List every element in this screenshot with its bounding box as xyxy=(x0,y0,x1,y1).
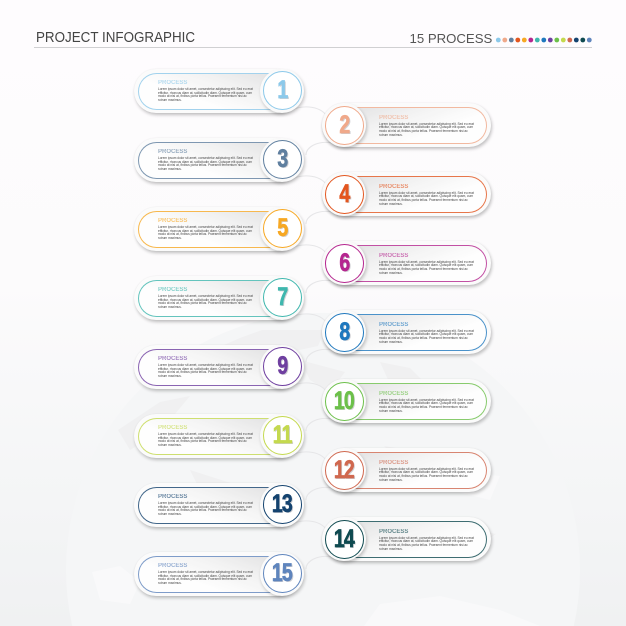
step 7 number badge: 7 xyxy=(277,283,287,311)
step 1 number badge xyxy=(260,68,304,112)
step 14 text: rutrum maximus. xyxy=(379,547,403,551)
step 12 number badge xyxy=(322,448,366,492)
step 2 text: rutrum maximus. xyxy=(379,133,403,137)
step 12 text: efficitur, rhoncus diam at, sollicitudin diam. Quisque elit quam, cum xyxy=(379,470,473,474)
step 2 heading: PROCESS xyxy=(379,114,408,120)
step 14 text xyxy=(379,536,474,551)
step 14 text: Lorem ipsum dolor sit amet, consectetur adipiscing elit. Sed eu erat xyxy=(379,536,474,540)
step 3 number badge xyxy=(260,138,304,182)
step 10 text xyxy=(379,398,474,413)
step 13 text: efficitur, rhoncus diam at, sollicitudin diam. Quisque elit quam, cum xyxy=(158,505,252,509)
step 14 number badge xyxy=(322,517,366,561)
step 12 card xyxy=(321,448,494,496)
step 11 number badge: 11 xyxy=(272,421,292,449)
step 2 text: Lorem ipsum dolor sit amet, consectetur adipiscing elit. Sed eu erat xyxy=(379,122,474,126)
step 5 text: modo at nisi at, finibus porta tellus. Praesent fermentum nisi ac xyxy=(158,232,247,236)
step 15 text xyxy=(158,570,253,585)
step 7 text: rutrum maximus. xyxy=(158,305,182,309)
step 13 number badge xyxy=(260,482,304,526)
step 11 text: modo at nisi at, finibus porta tellus. Praesent fermentum nisi ac xyxy=(158,439,247,443)
step 11 text: rutrum maximus. xyxy=(158,443,182,447)
subtitle: 15 process: 15 PROCESS xyxy=(410,30,492,46)
step 2 text: efficitur, rhoncus diam at, sollicitudin diam. Quisque elit quam, cum xyxy=(379,125,473,129)
step 15 number badge xyxy=(260,552,304,596)
step 7 heading: PROCESS xyxy=(158,287,187,293)
step 10 text: modo at nisi at, finibus porta tellus. Praesent fermentum nisi ac xyxy=(379,405,468,409)
step 13 text xyxy=(158,501,253,516)
step 5 text: efficitur, rhoncus diam at, sollicitudin diam. Quisque elit quam, cum xyxy=(158,229,252,233)
step 2 number badge: 2 xyxy=(339,110,349,138)
step 12 text: modo at nisi at, finibus porta tellus. Praesent fermentum nisi ac xyxy=(379,474,468,478)
step 1 number badge: 1 xyxy=(277,76,287,104)
step 15 text: rutrum maximus. xyxy=(158,581,182,585)
step 5 number badge xyxy=(260,206,304,250)
step 15 heading: PROCESS xyxy=(158,563,187,569)
title: PROJECT INFOGRAPHIC xyxy=(36,29,195,46)
step 8 text: rutrum maximus. xyxy=(379,340,403,344)
step 6 text: rutrum maximus. xyxy=(379,271,403,275)
step 3 text: Lorem ipsum dolor sit amet, consectetur adipiscing elit. Sed eu erat xyxy=(158,156,253,160)
step 8 text: modo at nisi at, finibus porta tellus. Praesent fermentum nisi ac xyxy=(379,336,468,340)
step 9 card xyxy=(134,344,306,393)
step 9 number badge: 9 xyxy=(277,352,287,380)
step 12 text: Lorem ipsum dolor sit amet, consectetur adipiscing elit. Sed eu erat xyxy=(379,467,474,471)
step 9 text: modo at nisi at, finibus porta tellus. Praesent fermentum nisi ac xyxy=(158,370,247,374)
step 8 text xyxy=(379,329,474,344)
step 11 text: Lorem ipsum dolor sit amet, consectetur adipiscing elit. Sed eu erat xyxy=(158,432,253,436)
step 6 text xyxy=(379,260,474,275)
step 5 card xyxy=(134,206,306,255)
step 1 text: rutrum maximus. xyxy=(158,98,182,102)
step 6 number badge: 6 xyxy=(339,248,349,276)
step 2 text xyxy=(379,122,474,137)
step 1 text: modo at nisi at, finibus porta tellus. Praesent fermentum nisi ac xyxy=(158,94,247,98)
step 9 text: Lorem ipsum dolor sit amet, consectetur adipiscing elit. Sed eu erat xyxy=(158,363,253,367)
step 1 card xyxy=(134,68,306,117)
step 4 heading: PROCESS xyxy=(379,184,408,190)
step 13 heading: PROCESS xyxy=(158,494,187,500)
step 10 number badge: 10 xyxy=(334,386,354,414)
step 14 heading: PROCESS xyxy=(379,528,408,534)
step 15 text: efficitur, rhoncus diam at, sollicitudin diam. Quisque elit quam, cum xyxy=(158,574,252,578)
step 1 heading: PROCESS xyxy=(158,80,187,86)
step 8 number badge xyxy=(322,310,366,354)
step 2 card xyxy=(321,102,494,151)
step 12 heading: PROCESS xyxy=(379,460,408,466)
header rule xyxy=(34,47,592,48)
step 5 heading: PROCESS xyxy=(158,218,187,224)
step 6 number badge xyxy=(322,241,366,285)
step 3 text: rutrum maximus. xyxy=(158,167,182,171)
step 2 number badge xyxy=(322,103,366,147)
step 7 card xyxy=(134,276,306,324)
step 3 text: modo at nisi at, finibus porta tellus. Praesent fermentum nisi ac xyxy=(158,163,247,167)
step 13 card xyxy=(134,482,306,531)
step 12 text: rutrum maximus. xyxy=(379,478,403,482)
step 14 number badge: 14 xyxy=(334,524,354,552)
step 11 text xyxy=(158,432,253,447)
step 5 text: rutrum maximus. xyxy=(158,236,182,240)
step 14 card xyxy=(321,516,494,565)
step 11 heading: PROCESS xyxy=(158,425,187,431)
step 3 card xyxy=(134,138,306,186)
step 4 number badge xyxy=(322,172,366,216)
step 4 text: efficitur, rhoncus diam at, sollicitudin diam. Quisque elit quam, cum xyxy=(379,194,473,198)
step 12 text xyxy=(379,467,474,482)
step 8 text: efficitur, rhoncus diam at, sollicitudin diam. Quisque elit quam, cum xyxy=(379,332,473,336)
colour dots legend xyxy=(496,38,592,42)
step 3 heading: PROCESS xyxy=(158,149,187,155)
step 3 number badge: 3 xyxy=(277,145,287,173)
step 4 text: rutrum maximus. xyxy=(379,202,403,206)
step 7 text: modo at nisi at, finibus porta tellus. Praesent fermentum nisi ac xyxy=(158,301,247,305)
step 1 text: Lorem ipsum dolor sit amet, consectetur adipiscing elit. Sed eu erat xyxy=(158,87,253,91)
step 4 text xyxy=(379,191,474,206)
step 1 text xyxy=(158,87,253,102)
step 7 text xyxy=(158,294,253,309)
step 13 text: Lorem ipsum dolor sit amet, consectetur adipiscing elit. Sed eu erat xyxy=(158,501,253,505)
step 9 text: efficitur, rhoncus diam at, sollicitudin diam. Quisque elit quam, cum xyxy=(158,367,252,371)
step 7 text: Lorem ipsum dolor sit amet, consectetur adipiscing elit. Sed eu erat xyxy=(158,294,253,298)
step 11 text: efficitur, rhoncus diam at, sollicitudin diam. Quisque elit quam, cum xyxy=(158,436,252,440)
step 15 number badge: 15 xyxy=(272,559,292,587)
step 9 text xyxy=(158,363,253,378)
step 13 text: rutrum maximus. xyxy=(158,512,182,516)
step 3 text xyxy=(158,156,253,171)
step 4 text: Lorem ipsum dolor sit amet, consectetur adipiscing elit. Sed eu erat xyxy=(379,191,474,195)
step 14 text: efficitur, rhoncus diam at, sollicitudin diam. Quisque elit quam, cum xyxy=(379,539,473,543)
step 1 text: efficitur, rhoncus diam at, sollicitudin diam. Quisque elit quam, cum xyxy=(158,91,252,95)
step 3 text: efficitur, rhoncus diam at, sollicitudin diam. Quisque elit quam, cum xyxy=(158,160,252,164)
step 10 heading: PROCESS xyxy=(379,390,408,396)
step 5 number badge: 5 xyxy=(277,214,287,242)
step 6 heading: PROCESS xyxy=(379,252,408,258)
step 13 number badge: 13 xyxy=(272,490,292,518)
step 11 number badge xyxy=(260,414,304,458)
step 9 text: rutrum maximus. xyxy=(158,374,182,378)
step 15 card xyxy=(134,552,306,600)
step 8 text: Lorem ipsum dolor sit amet, consectetur adipiscing elit. Sed eu erat xyxy=(379,329,474,333)
step 13 text: modo at nisi at, finibus porta tellus. Praesent fermentum nisi ac xyxy=(158,508,247,512)
step 4 number badge: 4 xyxy=(339,180,349,208)
step 10 text: rutrum maximus. xyxy=(379,409,403,413)
step 10 card xyxy=(321,378,494,427)
step 10 text: efficitur, rhoncus diam at, sollicitudin diam. Quisque elit quam, cum xyxy=(379,401,473,405)
step 9 number badge xyxy=(260,344,304,388)
step 14 text: modo at nisi at, finibus porta tellus. Praesent fermentum nisi ac xyxy=(379,543,468,547)
step 7 text: efficitur, rhoncus diam at, sollicitudin diam. Quisque elit quam, cum xyxy=(158,298,252,302)
step 15 text: Lorem ipsum dolor sit amet, consectetur adipiscing elit. Sed eu erat xyxy=(158,570,253,574)
step 4 text: modo at nisi at, finibus porta tellus. Praesent fermentum nisi ac xyxy=(379,198,468,202)
step 8 number badge: 8 xyxy=(339,318,349,346)
step 11 card xyxy=(134,414,306,462)
step 10 text: Lorem ipsum dolor sit amet, consectetur adipiscing elit. Sed eu erat xyxy=(379,398,474,402)
step 2 text: modo at nisi at, finibus porta tellus. Praesent fermentum nisi ac xyxy=(379,129,468,133)
step 15 text: modo at nisi at, finibus porta tellus. Praesent fermentum nisi ac xyxy=(158,577,247,581)
step 6 text: efficitur, rhoncus diam at, sollicitudin diam. Quisque elit quam, cum xyxy=(379,263,473,267)
step 4 card xyxy=(321,172,494,220)
step 5 text xyxy=(158,225,253,240)
step 5 text: Lorem ipsum dolor sit amet, consectetur adipiscing elit. Sed eu erat xyxy=(158,225,253,229)
step 8 heading: PROCESS xyxy=(379,322,408,328)
step 6 card xyxy=(321,240,494,289)
step 7 number badge xyxy=(260,276,304,320)
step 10 number badge xyxy=(322,379,366,423)
step 9 heading: PROCESS xyxy=(158,356,187,362)
step 6 text: Lorem ipsum dolor sit amet, consectetur adipiscing elit. Sed eu erat xyxy=(379,260,474,264)
step 12 number badge: 12 xyxy=(334,456,354,484)
step 6 text: modo at nisi at, finibus porta tellus. Praesent fermentum nisi ac xyxy=(379,267,468,271)
step 8 card xyxy=(321,310,494,358)
